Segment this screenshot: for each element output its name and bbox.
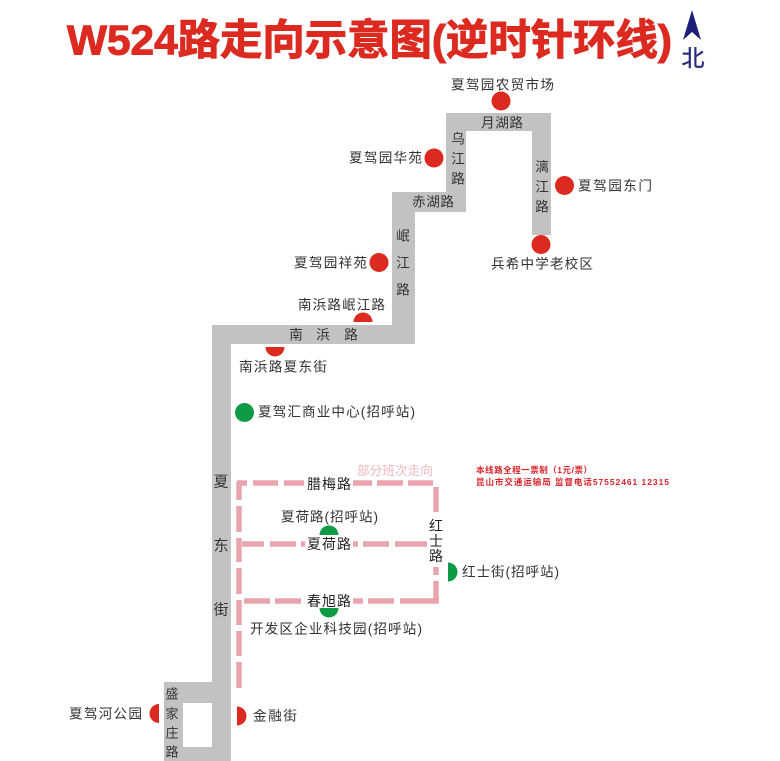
stop labels: 夏荷路(招呼站) [281,510,378,524]
route: dashed partial-service loop [237,482,439,688]
road labels: 江 [535,180,549,194]
fare and supervision note: 本线路全程一票制（1元/票） [476,465,592,475]
road labels: 赤湖路 [412,194,454,210]
road labels: 浜 [316,328,330,342]
partial service note: 部分班次走向 [357,463,433,478]
road labels: 庄 [165,726,179,740]
stop labels: 开发区企业科技园(招呼站) [250,620,422,636]
road labels: 南 [289,328,303,342]
stop labels: 夏驾园祥苑 [294,256,367,270]
stop labels: 夏驾园农贸市场 [451,76,554,92]
stop labels: 金融街 [253,708,297,724]
road labels: 家 [165,706,179,722]
icon: north arrow: 北 [682,45,704,71]
stops: red and green markers [150,92,574,726]
road labels: 路 [165,744,179,760]
road labels: 士 [429,533,443,549]
road labels: 漓 [535,158,549,174]
road labels: 路 [396,282,410,298]
road labels: 江 [396,256,410,270]
road labels [165,116,549,760]
road labels: 乌 [451,132,465,146]
fare and supervision note [476,465,669,487]
stop labels: 夏驾汇商业中心(招呼站) [258,404,415,420]
road labels: 路 [535,200,549,214]
stop labels: 南浜路夏东街 [239,360,327,374]
road labels: 江 [451,152,465,166]
fare and supervision note: 昆山市交通运输局 监督电话57552461 12315 [476,477,669,487]
stop labels: 兵希中学老校区 [491,256,593,272]
road labels: 路 [451,172,465,186]
stop labels: 南浜路岷江路 [298,298,385,312]
stop labels: 夏驾园华苑 [349,150,422,166]
road labels: 夏荷路 [307,536,351,552]
stop labels [69,76,652,724]
road labels: 东 [213,538,229,554]
road labels: 街 [213,602,229,618]
title: W524路走向示意图(逆时针环线) [67,16,672,64]
road labels: 春旭路 [307,593,351,609]
icon: north arrow [682,10,704,71]
stop labels: 夏驾园东门 [578,178,652,194]
road labels: 腊梅路 [307,476,351,492]
road labels: 路 [429,548,443,564]
road labels: 盛 [165,686,179,702]
road labels: 夏 [213,474,229,490]
road labels: 路 [344,328,358,342]
road labels: 红 [429,518,443,534]
road labels: 岷 [396,228,410,244]
road labels: 月湖路 [481,116,523,130]
stop labels: 夏驾河公园 [69,706,142,722]
route: grey road network [164,113,551,761]
stop labels: 红士街(招呼站) [462,564,559,580]
